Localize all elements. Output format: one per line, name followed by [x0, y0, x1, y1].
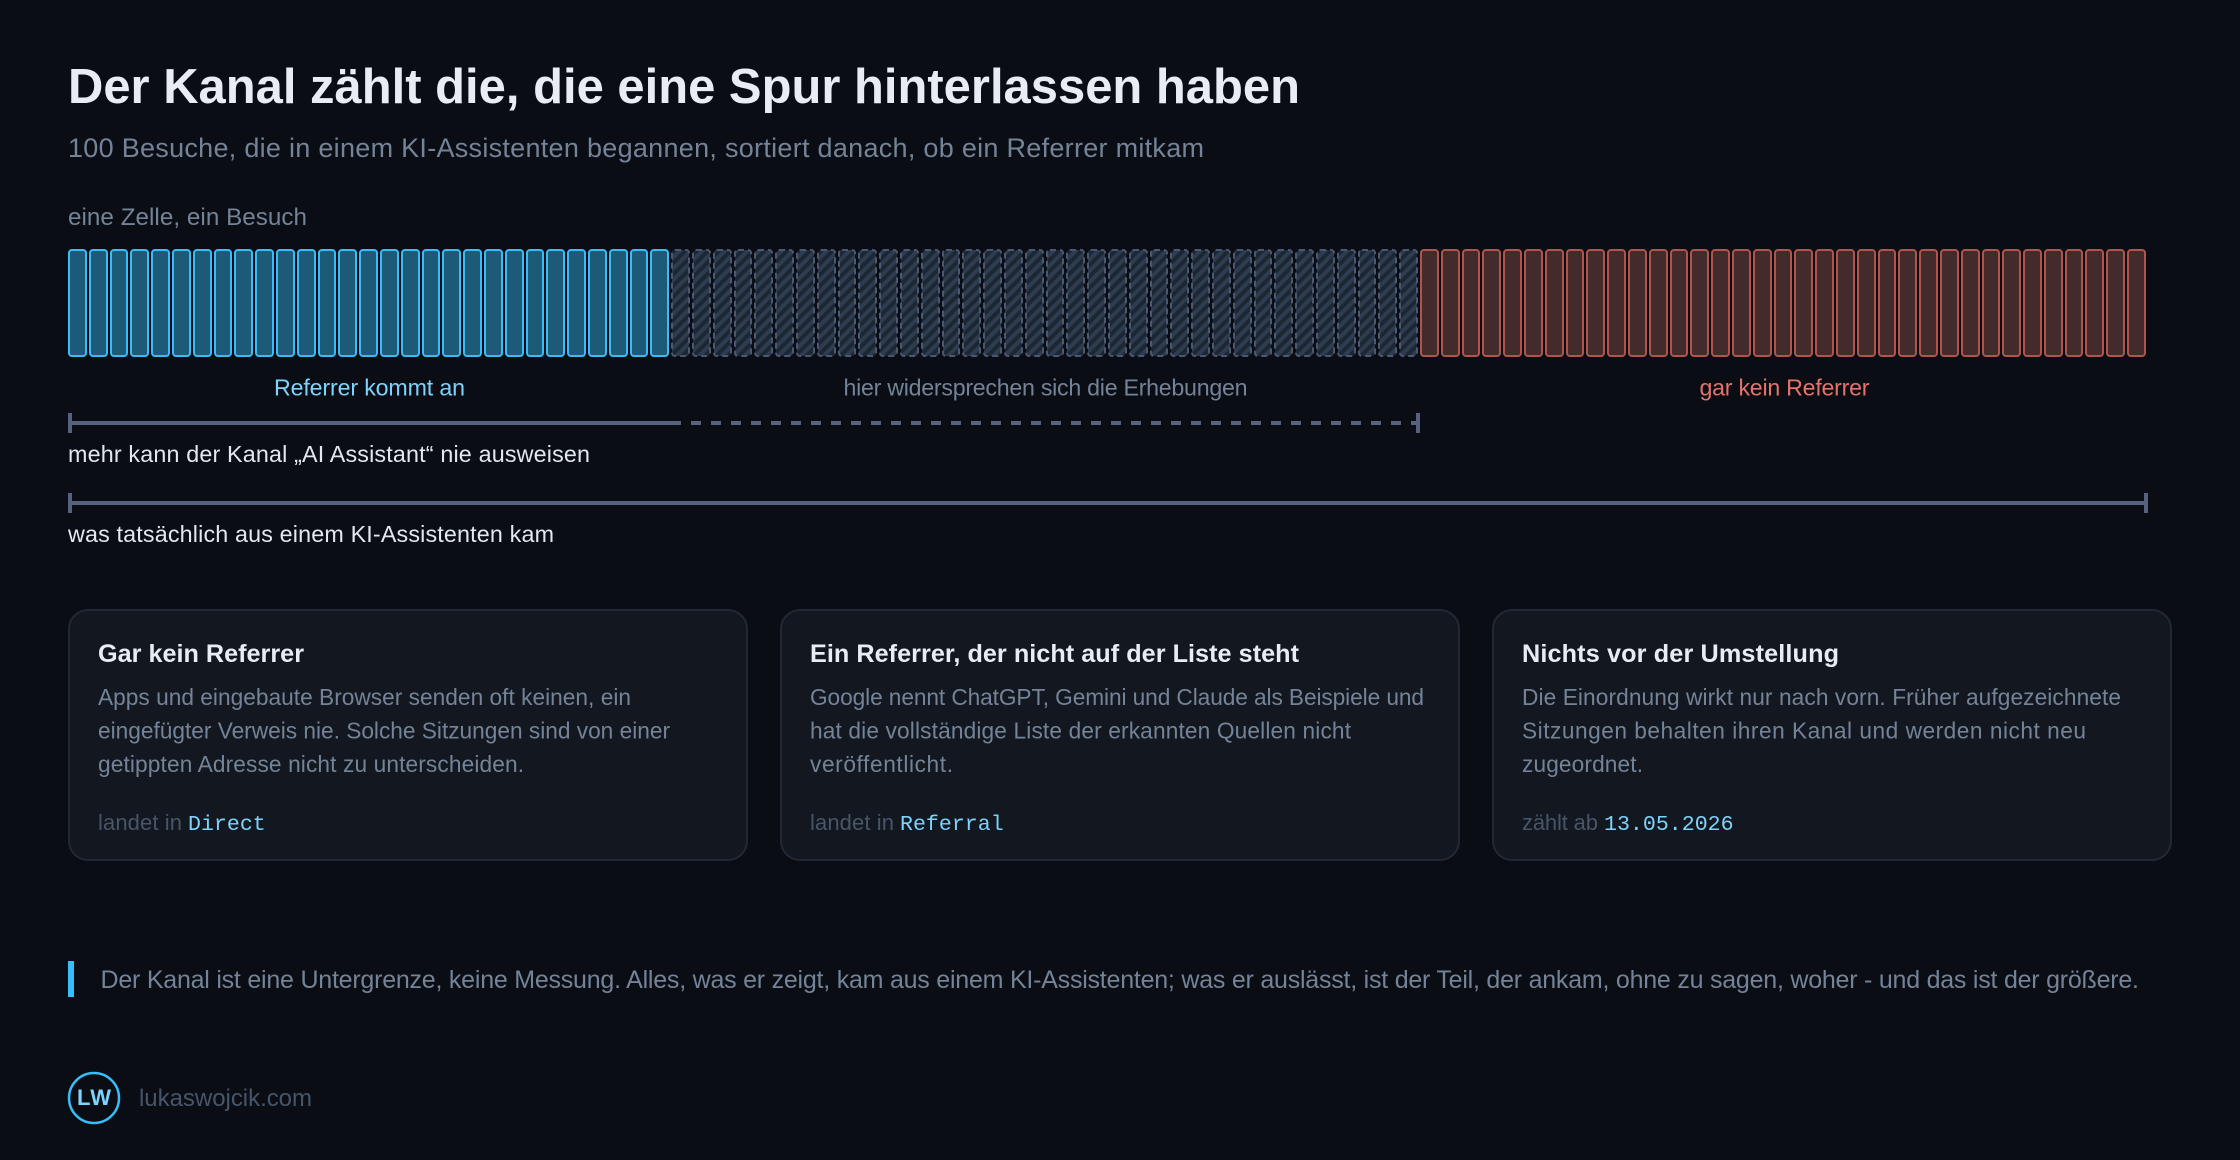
title: Der Kanal zählt die, die eine Spur hinterlassen haben [68, 60, 1300, 114]
panel: gar kein Referrer: Apps und eingebaute Browser senden oft keinen, ein [98, 684, 631, 710]
ruler label: actual total: was tatsächlich aus einem KI-Assistenten kam [67, 521, 554, 547]
grid caption: eine Zelle, ein Besuch [68, 204, 307, 231]
panel: nichts vor der Umstellung: zugeordnet. [1522, 751, 1643, 777]
panel: nichts vor der Umstellung: Nichts vor der Umstellung [1522, 640, 1839, 668]
panel: gar kein Referrer: Gar kein Referrer [98, 640, 304, 668]
panel: Referrer nicht auf der Liste [781, 610, 1459, 860]
callout accent bar [68, 961, 74, 997]
panel: gar kein Referrer: Direct [188, 813, 266, 837]
ruler: actual total [68, 493, 2148, 513]
logo: LW monogram [69, 1073, 119, 1123]
panel: gar kein Referrer [69, 610, 747, 860]
panel: Referrer nicht auf der Liste: Google nennt ChatGPT, Gemini und Claude als Beispiele und [810, 684, 1424, 710]
label: surveys disagree: hier widersprechen sich die Erhebungen [844, 374, 1248, 400]
segment: no referrer [1420, 249, 2146, 357]
callout text: Der Kanal ist eine Untergrenze, keine Messung. Alles, was er zeigt, kam aus einem KI-Assistenten; was er auslässt, ist der Teil, der ankam, ohne zu sagen, woher - und das ist der größere. [100, 966, 2139, 994]
subtitle: 100 Besuche, die in einem KI-Assistenten begannen, sortiert danach, ob ein Referrer mitkam [68, 133, 1204, 163]
logo: LW monogram: LW [77, 1085, 111, 1110]
panel: Referrer nicht auf der Liste: hat die vollständige Liste der erkannten Quellen nicht [810, 718, 1352, 744]
panel: Referrer nicht auf der Liste: Ein Referrer, der nicht auf der Liste steht [810, 640, 1300, 668]
waffle row: 100 visits [68, 249, 2146, 357]
label: referrer arrives: Referrer kommt an [274, 374, 465, 400]
panel: gar kein Referrer: getippten Adresse nicht zu unterscheiden. [98, 751, 524, 777]
panel: nichts vor der Umstellung [1493, 610, 2171, 860]
ruler: channel maximum [68, 413, 1420, 433]
panel: nichts vor der Umstellung: 13.05.2026 [1604, 813, 1734, 837]
panel: gar kein Referrer: landet in [98, 810, 182, 835]
panel: nichts vor der Umstellung: Die Einordnung wirkt nur nach vorn. Früher aufgezeichnete [1522, 684, 2121, 710]
panel: nichts vor der Umstellung: zählt ab [1522, 810, 1598, 835]
panel: Referrer nicht auf der Liste: Referral [900, 813, 1004, 837]
panel: Referrer nicht auf der Liste: landet in [810, 810, 894, 835]
panel: nichts vor der Umstellung: Sitzungen behalten ihren Kanal und werden nicht neu [1522, 718, 2086, 744]
segment: surveys disagree cells [672, 250, 1417, 356]
panel: Referrer nicht auf der Liste: veröffentlicht. [810, 751, 953, 777]
label: no referrer: gar kein Referrer [1700, 374, 1870, 400]
footer site name: lukaswojcik.com [139, 1085, 312, 1112]
panel: gar kein Referrer: eingefügter Verweis nie. Solche Sitzungen sind von einer [98, 718, 670, 744]
ruler label: channel maximum: mehr kann der Kanal „AI Assistant“ nie ausweisen [68, 441, 590, 467]
segment: referrer arrives [68, 249, 669, 357]
